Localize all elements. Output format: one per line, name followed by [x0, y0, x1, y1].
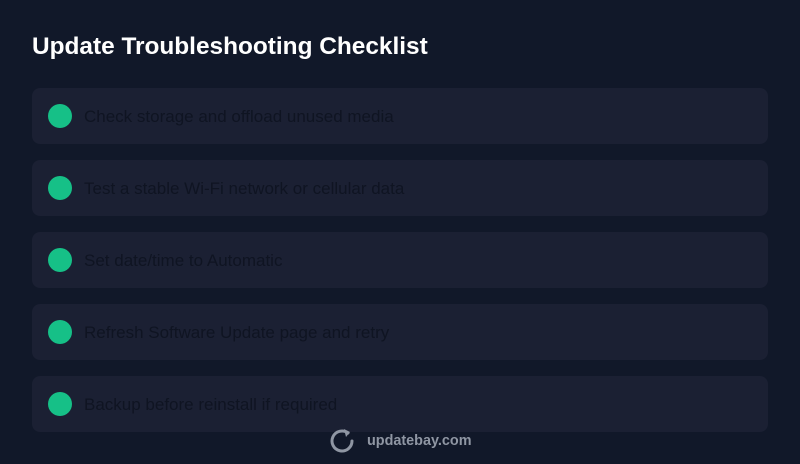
- title: Update Troubleshooting Checklist: [32, 33, 428, 60]
- card: date/time: Set date/time to Automatic: [84, 251, 282, 270]
- card: storage: Check storage and offload unused media: [84, 107, 394, 126]
- card: backup: [32, 376, 768, 432]
- card: storage: [32, 88, 768, 144]
- card: network: Test a stable Wi-Fi network or cellular data: [84, 179, 404, 198]
- card: date/time: [32, 232, 768, 288]
- card: network: [32, 160, 768, 216]
- footer logo: [330, 429, 472, 452]
- footer logo: updatebay.com: [367, 433, 472, 449]
- card: refresh: Refresh Software Update page and retry: [84, 323, 389, 342]
- card: refresh: [32, 304, 768, 360]
- card: backup: Backup before reinstall if required: [84, 395, 337, 414]
